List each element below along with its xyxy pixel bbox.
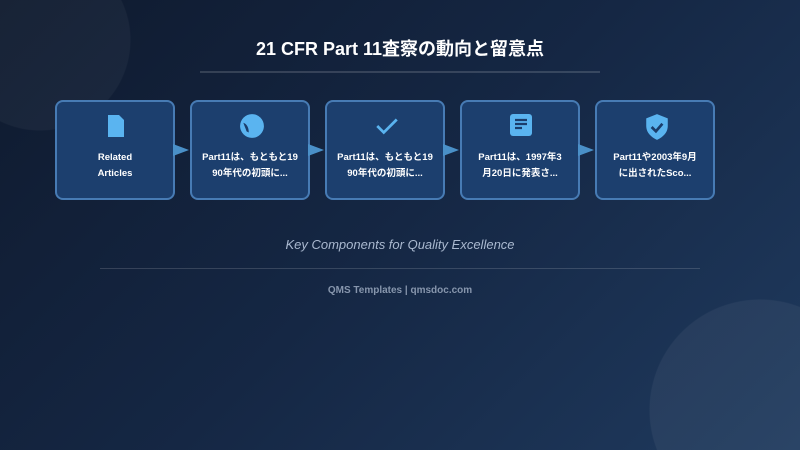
card 3: 90年代の初頭に... bbox=[347, 168, 423, 178]
icon: check bbox=[376, 118, 398, 134]
card 2: 90年代の初頭に... bbox=[212, 168, 288, 178]
card 2: Part11は、もともと19 bbox=[202, 152, 298, 163]
arrow 1 bbox=[173, 144, 189, 156]
card 3: Part11は、もともと19 bbox=[337, 152, 433, 163]
arrow 2 bbox=[308, 144, 324, 156]
card 5: Part11や2003年9月 bbox=[613, 152, 697, 163]
arrow 4 bbox=[578, 144, 594, 156]
card 4 bbox=[460, 100, 580, 200]
card 3 bbox=[325, 100, 445, 200]
card 5 bbox=[595, 100, 715, 200]
card 2 bbox=[190, 100, 310, 200]
icon: list document bbox=[510, 114, 532, 136]
subtitle: Key Components for Quality Excellence bbox=[285, 237, 515, 252]
arrow 3 bbox=[443, 144, 459, 156]
card 4: Part11は、1997年3 bbox=[478, 152, 562, 163]
footer: QMS Templates | qmsdoc.com bbox=[328, 285, 472, 296]
card 4: 月20日に発表さ... bbox=[482, 168, 558, 178]
card 1: Related Articles bbox=[55, 100, 175, 200]
icon: globe bbox=[240, 114, 264, 138]
title: 21 CFR Part 11査察の動向と留意点 bbox=[256, 39, 544, 59]
card 5: に出されたSco... bbox=[619, 168, 691, 178]
card 1: Related Articles: Related bbox=[98, 152, 132, 163]
card 1: Related Articles: Articles bbox=[98, 168, 132, 178]
icon: shield check bbox=[646, 114, 668, 140]
icon: document bbox=[108, 115, 124, 137]
